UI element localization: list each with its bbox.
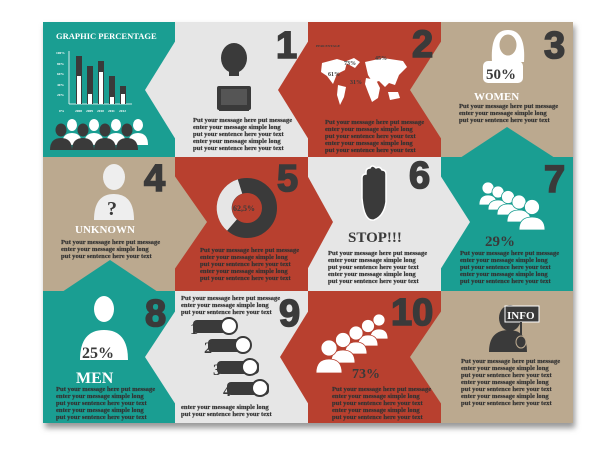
number 6: 6 [409, 155, 430, 197]
donut chart: 62,5% [233, 204, 255, 213]
number 2: 2 [412, 24, 433, 66]
text block: enter your message simple long [461, 365, 549, 372]
text block: put your sentence here your text [193, 145, 284, 152]
panel 6 [328, 155, 430, 285]
bar chart: 2012 [119, 109, 126, 113]
text block: enter your message simple long [193, 124, 281, 131]
text block: enter your message simple long [61, 246, 149, 253]
text block: put your sentence here your text [461, 386, 552, 393]
arrows [62, 40, 555, 405]
icon: women row [479, 182, 545, 230]
text block: Put your message here put message [461, 358, 560, 365]
icon: man: 25% [82, 345, 114, 362]
bar chart: 100% [56, 51, 65, 55]
text block: Put your message here put message [325, 119, 424, 126]
text block bottom: enter your message simple long [181, 404, 269, 411]
panel 10 [316, 292, 433, 421]
text block: Put your message here put message [56, 386, 155, 393]
text block: enter your message simple long [460, 257, 548, 264]
text block: enter your message simple long [459, 110, 547, 117]
text block: put your sentence here your text [61, 253, 152, 260]
text block top: put your sentence here your text [181, 309, 272, 316]
panel 2 [316, 24, 433, 154]
bar chart: 80% [57, 62, 64, 66]
text block: put your sentence here your text [461, 400, 552, 407]
bar chart: 2009 [86, 109, 93, 113]
panel: graphic percentage [50, 31, 157, 150]
text block: put your sentence here your text [328, 264, 419, 271]
icon: unknown person: ? [107, 198, 117, 220]
text block: enter your message simple long [332, 393, 420, 400]
text block: Put your message here put message [332, 386, 431, 393]
world map [321, 58, 407, 105]
number 7: 7 [544, 159, 565, 201]
bar chart: 60% [57, 72, 64, 76]
bar chart: 40% [57, 83, 64, 87]
label 29%: 29% [485, 234, 515, 250]
bar chart: 20% [57, 93, 64, 97]
text block: put your sentence here your text [460, 278, 551, 285]
number 9: 9 [279, 293, 300, 335]
label UNKNOWN: UNKNOWN [75, 224, 135, 236]
icon: computer user [217, 43, 251, 111]
text block: Put your message here put message [200, 247, 299, 254]
icon: info sign person: INFO [507, 310, 535, 322]
text block: Put your message here put message [193, 117, 292, 124]
panel 2: 61% [328, 72, 340, 78]
numbered list: 3 [213, 362, 221, 379]
text block: put your sentence here your text [193, 131, 284, 138]
panel 2: 31% [350, 80, 362, 86]
text block: put your sentence here your text [460, 264, 551, 271]
number 5: 5 [277, 158, 298, 200]
text block: enter your message simple long [200, 268, 288, 275]
panel 2: 45% [375, 56, 387, 62]
bar chart: 0% [59, 109, 65, 113]
panel 2: PERCENTAGE [316, 44, 341, 48]
numbered list: 4 [223, 383, 231, 400]
text block: Put your message here put message [459, 103, 558, 110]
panel 2: 73% [344, 61, 356, 67]
label STOP: STOP!!! [348, 230, 402, 246]
label 73%: 73% [352, 367, 380, 382]
text block top: enter your message simple long [181, 302, 269, 309]
icon: hand [362, 166, 386, 220]
numbered list: 1 [190, 321, 198, 338]
text block top: Put your message here put message [181, 295, 280, 302]
panel 5 [200, 158, 299, 282]
text block: enter your message simple long [56, 407, 144, 414]
text block: enter your message simple long [200, 254, 288, 261]
panel backgrounds [43, 22, 573, 423]
text block: enter your message simple long [460, 271, 548, 278]
text block: enter your message simple long [56, 393, 144, 400]
number 8: 8 [145, 293, 166, 335]
panel 4 [61, 158, 165, 260]
text block: put your sentence here your text [459, 117, 550, 124]
text block: put your sentence here your text [56, 400, 147, 407]
bar chart: 2008 [75, 109, 82, 113]
text block: Put your message here put message [328, 250, 427, 257]
panel 3 [459, 25, 565, 124]
text block: put your sentence here your text [200, 275, 291, 282]
bar chart: 2010 [97, 109, 104, 113]
number 1: 1 [276, 25, 297, 67]
text block: Put your message here put message [460, 250, 559, 257]
title: GRAPHIC PERCENTAGE [56, 31, 157, 41]
panel 8 [56, 293, 166, 421]
text block: put your sentence here your text [325, 133, 416, 140]
panel 9 [181, 293, 300, 418]
number 3: 3 [544, 25, 565, 67]
text block: put your sentence here your text [328, 278, 419, 285]
panel 1 [193, 25, 297, 152]
numbered list: 2 [204, 340, 212, 357]
text block: put your sentence here your text [325, 147, 416, 154]
text block: put your sentence here your text [56, 414, 147, 421]
text block bottom: put your sentence here your text [181, 411, 272, 418]
text block: put your sentence here your text [200, 261, 291, 268]
number 10: 10 [391, 292, 433, 334]
text block: enter your message simple long [461, 393, 549, 400]
text block: enter your message simple long [325, 126, 413, 133]
panel info [461, 305, 560, 407]
icon: woman: 50% [486, 67, 516, 83]
number 4: 4 [144, 158, 165, 200]
text block: Put your message here put message [61, 239, 160, 246]
label MEN: MEN [76, 370, 114, 387]
text block: enter your message simple long [328, 271, 416, 278]
bar chart [56, 51, 132, 113]
icon: audience [50, 119, 148, 150]
bar chart: 2011 [108, 109, 115, 113]
text block: enter your message simple long [325, 140, 413, 147]
text block: put your sentence here your text [332, 414, 423, 421]
panel 7 [460, 159, 565, 285]
text block: put your sentence here your text [461, 372, 552, 379]
text block: enter your message simple long [193, 138, 281, 145]
text block: enter your message simple long [332, 407, 420, 414]
text block: enter your message simple long [461, 379, 549, 386]
numbered list [190, 318, 269, 400]
icon: crowd [316, 314, 388, 373]
text block: put your sentence here your text [332, 400, 423, 407]
text block: enter your message simple long [328, 257, 416, 264]
label WOMEN: WOMEN [474, 91, 519, 103]
